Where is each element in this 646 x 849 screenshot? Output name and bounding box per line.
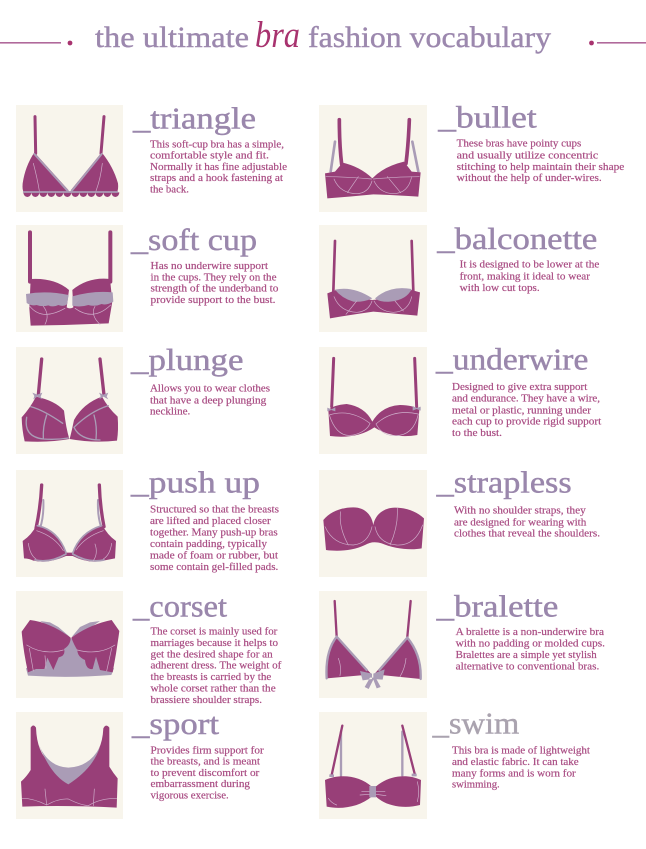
description: triangle: comfortable style and fit. xyxy=(150,149,269,161)
heading: balconette: _balconette xyxy=(436,221,597,256)
description: corset: The corset is mainly used for xyxy=(150,625,278,637)
description: swim: swimming. xyxy=(452,779,500,791)
heading: strapless: _strapless xyxy=(436,465,572,500)
heading: underwire: _underwire xyxy=(435,341,588,376)
description: balconette: with low cut tops. xyxy=(460,282,540,294)
description: swim: many forms and is worn for xyxy=(452,768,576,780)
description: sport xyxy=(150,744,264,801)
description: swim xyxy=(452,745,590,791)
title: fashion vocabulary xyxy=(308,21,551,54)
description: push up: contain padding, typically xyxy=(150,538,268,550)
panel: bullet xyxy=(319,100,625,212)
title: bra xyxy=(255,15,300,56)
heading: bralette: _bralette xyxy=(436,589,558,624)
icon: bow xyxy=(360,669,385,689)
description: plunge: Allows you to wear clothes xyxy=(150,383,270,395)
description: plunge: that have a deep plunging xyxy=(150,394,267,406)
heading: swim: _swim xyxy=(432,705,519,740)
icon: plunge bra xyxy=(22,359,118,442)
description: balconette: front, making it ideal to wear xyxy=(460,270,590,282)
description: underwire: each cup to provide rigid support xyxy=(452,415,601,427)
icon: sport bra xyxy=(21,725,118,808)
description: soft cup: in the cups. They rely on the xyxy=(150,271,277,283)
panel: plunge xyxy=(16,342,270,454)
icon: corset xyxy=(22,620,119,677)
description: swim: This bra is made of lightweight xyxy=(452,745,590,757)
description: sport: to prevent discomfort or xyxy=(150,767,260,779)
description: soft cup: provide support to the bust. xyxy=(150,294,276,306)
description: bralette: Bralettes are a simple yet stylish xyxy=(456,649,597,661)
description: push up: some contain gel-filled pads. xyxy=(150,561,278,573)
description: corset: the breasts is carried by the xyxy=(150,671,272,683)
description: push up: are lifted and placed closer xyxy=(150,515,271,527)
icon: swim bra xyxy=(325,726,421,808)
description: corset: marriages because it helps to xyxy=(150,637,278,649)
heading: bullet: _bullet xyxy=(437,100,537,135)
panel: balconette xyxy=(319,221,600,332)
panel: push up xyxy=(16,465,279,577)
panel: swim xyxy=(319,705,590,819)
description: bullet: and usually utilize concentric xyxy=(457,149,599,161)
description: sport: embarrassment during xyxy=(150,778,251,790)
description: underwire xyxy=(452,381,601,439)
panel: bralette xyxy=(319,589,605,698)
panel: soft cup xyxy=(16,222,278,332)
icon: soft cup bra xyxy=(26,232,113,326)
icon: bralette xyxy=(326,601,421,689)
title: the ultimate xyxy=(95,21,249,54)
description: push up: Structured so that the breasts xyxy=(150,504,279,516)
description: underwire: Designed to give extra support xyxy=(452,381,587,393)
description: plunge xyxy=(150,383,270,418)
description: strapless: clothes that reveal the shoulders. xyxy=(454,528,600,540)
description: bullet: stitching to help maintain their shape xyxy=(457,161,625,173)
description: bullet: These bras have pointy cups xyxy=(457,138,581,150)
icon: triangle bra xyxy=(22,117,119,197)
heading: soft cup: _soft cup xyxy=(130,222,257,257)
title xyxy=(0,15,646,56)
description: bralette: A bralette is a non-underwire bra xyxy=(456,626,604,638)
description: bralette xyxy=(456,626,605,672)
description: swim: and elastic fabric. It can take xyxy=(452,756,579,768)
panel: underwire xyxy=(319,341,601,454)
panel: triangle xyxy=(16,100,287,212)
description: sport: the breasts, and is meant xyxy=(150,755,260,767)
description: underwire: and endurance. They have a wire, xyxy=(452,393,600,405)
description: triangle xyxy=(150,138,287,195)
description: corset xyxy=(150,625,282,706)
icon: strapless bra xyxy=(323,507,424,551)
description: corset: adherent dress. The weight of xyxy=(150,659,282,671)
description: soft cup xyxy=(150,260,278,306)
description: underwire: to the bust. xyxy=(452,427,502,439)
description: soft cup: strength of the underband to xyxy=(150,283,278,295)
heading: triangle: _triangle xyxy=(132,100,256,135)
panel: corset xyxy=(16,589,282,706)
description: underwire: metal or plastic, running under xyxy=(452,404,591,416)
description: sport: vigorous exercise. xyxy=(150,789,229,801)
description: bullet xyxy=(457,138,625,184)
description: corset: get the desired shape for an xyxy=(150,648,273,660)
description: strapless xyxy=(454,505,600,540)
description: push up: made of foam or rubber, but xyxy=(150,550,278,562)
description: strapless: With no shoulder straps, they xyxy=(454,505,586,517)
description: balconette xyxy=(460,259,600,294)
description: bralette: alternative to conventional bras. xyxy=(456,660,599,672)
description: strapless: are designed for wearing with xyxy=(454,516,587,528)
description: plunge: neckline. xyxy=(150,406,190,418)
description: sport: Provides firm support for xyxy=(150,744,264,756)
icon: bullet bra xyxy=(325,120,421,198)
heading: sport: _sport xyxy=(131,706,219,741)
heading: push up: _push up xyxy=(130,465,260,500)
icon: push up bra xyxy=(23,485,116,562)
description: soft cup: Has no underwire support xyxy=(150,260,268,272)
heading: plunge: _plunge xyxy=(130,342,244,377)
description: corset: whole corset rather than the xyxy=(150,683,276,695)
description: balconette: It is designed to be lower at the xyxy=(460,259,600,271)
description: push up: together. Many push-up bras xyxy=(150,527,278,539)
description: bullet: without the help of under-wires. xyxy=(457,172,602,184)
panel: sport xyxy=(16,706,264,819)
heading: corset: _corset xyxy=(132,589,227,624)
icon: underwire bra xyxy=(327,358,421,437)
description: triangle: straps and a hook fastening at xyxy=(150,172,283,184)
icon: balconette bra xyxy=(327,241,420,318)
description: triangle: Normally it has fine adjustable xyxy=(150,161,287,173)
description: corset: brassiere shoulder straps. xyxy=(150,694,262,706)
description: push up xyxy=(150,504,279,573)
description: triangle: This soft-cup bra has a simple, xyxy=(150,138,284,150)
panel: strapless xyxy=(319,465,600,577)
description: triangle: the back. xyxy=(150,183,189,195)
description: bralette: with no padding or molded cups. xyxy=(456,638,605,650)
